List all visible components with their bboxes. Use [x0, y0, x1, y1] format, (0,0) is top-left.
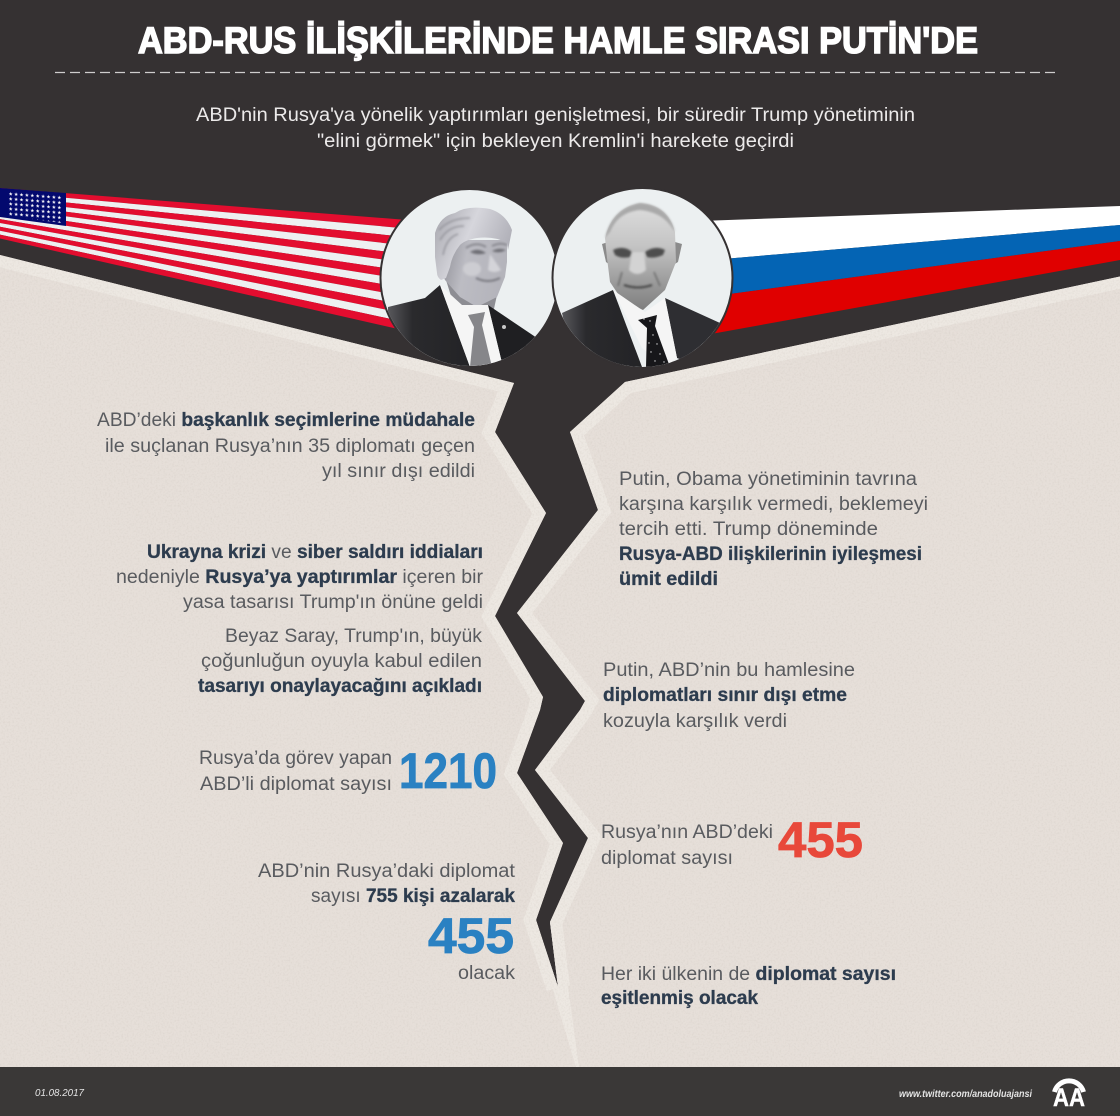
stat: 455 after reduction: 455	[428, 908, 514, 964]
stat: 455 after reduction: olacak	[458, 963, 516, 984]
stat: 1210 US diplomats in Russia: Rusya’da görev yapan	[199, 748, 392, 769]
US flag	[0, 188, 420, 334]
portrait: Trump	[380, 189, 558, 370]
stat: 1210 US diplomats in Russia	[199, 743, 497, 799]
stat: 455 Russian diplomats in US: Rusya’nın ABD’deki	[601, 822, 773, 843]
text: Putin waited: tercih etti. Trump döneminde	[619, 519, 878, 540]
portrait: Putin	[552, 188, 732, 370]
stat: 1210 US diplomats in Russia: 1210	[399, 743, 497, 799]
stat: 455 Russian diplomats in US	[601, 812, 863, 869]
text: White House: çoğunluğun oyuyla kabul edilen	[201, 651, 482, 672]
text: equal diplomat numbers: eşitlenmiş olacak	[601, 988, 758, 1009]
text: Putin waited: karşına karşılık vermedi, beklemeyi	[619, 494, 928, 515]
source url: www.twitter.com/anadoluajansi	[899, 1089, 1032, 1100]
footer	[0, 1067, 1120, 1116]
logo: AA: AA	[1053, 1084, 1085, 1112]
title: ABD-RUS İLİŞKİLERİNDE HAMLE SIRASI PUTİN'DE	[138, 20, 978, 61]
text: Putin waited: Rusya-ABD ilişkilerinin iyileşmesi	[619, 544, 922, 565]
text: Putin's response	[603, 660, 855, 732]
text: election interference: ABD’deki başkanlık seçimlerine müdahale	[97, 410, 475, 431]
stat: 455 Russian diplomats in US: diplomat sayısı	[601, 848, 733, 869]
text: election interference: yıl sınır dışı edildi	[322, 461, 475, 482]
subtitle	[196, 105, 915, 152]
stat: 455 Russian diplomats in US: 455	[778, 812, 863, 868]
text: White House: tasarıyı onaylayacağını açıkladı	[198, 676, 482, 697]
text: Putin waited	[619, 469, 928, 590]
text: Ukraine crisis and sanctions: yasa tasarısı Trump'ın önüne geldi	[183, 592, 483, 613]
stat: 1210 US diplomats in Russia: ABD’li diplomat sayısı	[200, 774, 392, 795]
text: equal diplomat numbers: Her iki ülkenin de diplomat sayısı	[601, 964, 896, 985]
stat: 455 after reduction: ABD’nin Rusya’daki diplomat	[258, 861, 516, 882]
subtitle: "elini görmek" için bekleyen Kremlin'i harekete geçirdi	[317, 131, 794, 152]
text: White House: Beyaz Saray, Trump'ın, büyük	[225, 626, 483, 647]
paper panels split by crack	[0, 240, 1120, 1100]
text: election interference: ile suçlanan Rusya’nın 35 diplomatı geçen	[105, 436, 475, 457]
text: Ukraine crisis and sanctions: nedeniyle Rusya’ya yaptırımlar içeren bir	[116, 567, 484, 588]
text: Putin's response: Putin, ABD’nin bu hamlesine	[603, 660, 855, 681]
text: Putin's response: diplomatları sınır dışı etme	[603, 685, 847, 706]
title divider	[55, 72, 1055, 74]
stat: 455 after reduction: sayısı 755 kişi azalarak	[311, 886, 515, 907]
Russian flag	[700, 206, 1120, 336]
text: Putin's response: kozuyla karşılık verdi	[603, 711, 787, 732]
text: Ukraine crisis and sanctions: Ukrayna krizi ve siber saldırı iddiaları	[147, 542, 483, 563]
text: election interference	[97, 410, 475, 482]
date: 01.08.2017	[35, 1088, 84, 1099]
text: equal diplomat numbers	[601, 964, 896, 1009]
text: Putin waited: ümit edildi	[619, 569, 718, 590]
subtitle: ABD'nin Rusya'ya yönelik yaptırımları genişletmesi, bir süredir Trump yönetiminin	[196, 105, 915, 126]
stat: 455 after reduction	[258, 861, 516, 984]
text: White House	[198, 626, 483, 697]
text: Putin waited: Putin, Obama yönetiminin tavrına	[619, 469, 917, 490]
text: Ukraine crisis and sanctions	[116, 542, 484, 613]
